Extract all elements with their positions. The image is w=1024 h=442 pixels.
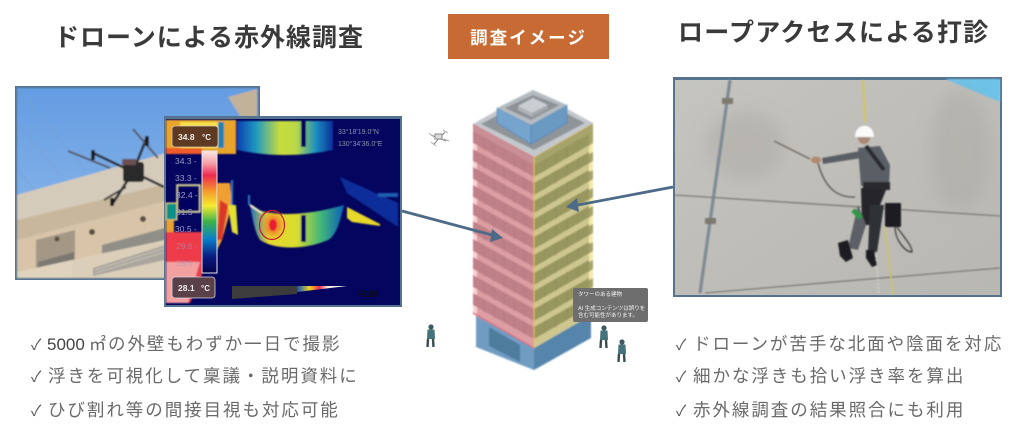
icon: person left: [427, 324, 435, 347]
title: rope access hammering test: ロープアクセスによる打診: [678, 19, 990, 47]
list: rope access benefits: [676, 334, 1003, 420]
thermal logo: FLIR: [358, 289, 378, 299]
thermal coordinates: 33°18'19.0"N: [338, 128, 379, 136]
roof corner: [228, 89, 257, 120]
list: rope access benefits: 細かな浮きも拾い浮き率を算出: [693, 366, 965, 386]
parapet: [17, 140, 258, 278]
thermal min label: °C: [201, 284, 210, 293]
thermal histogram: [232, 286, 347, 299]
list: drone benefits: ✓: [31, 337, 42, 354]
list: drone benefits: 5000: [47, 335, 85, 354]
thermal max label: °C: [202, 133, 211, 142]
illustration: isometric building: [473, 90, 593, 370]
list: rope access benefits: ✓: [676, 403, 687, 420]
thermal scale labels: 34.3 -: [175, 156, 197, 166]
thermal top band: [237, 121, 333, 155]
thermal top-left block: [166, 120, 236, 154]
worker: [811, 126, 912, 267]
list: drone benefits: ひび割れ等の間接目視も対応可能: [48, 400, 340, 420]
icon: person far right: [618, 339, 626, 362]
icon: person right: [600, 325, 608, 348]
tooltip: AI notice: 含む可能性があります。: [578, 311, 638, 319]
list: drone benefits: [31, 334, 359, 420]
list: rope access benefits: ✓: [676, 337, 687, 354]
icon: small drone: [429, 130, 449, 146]
ropes: [863, 80, 865, 122]
list: drone benefits: ✓: [31, 369, 42, 386]
arrow: thermal to pink wall: [402, 211, 503, 242]
thermal scale labels: 32.4 -: [176, 190, 198, 200]
thermal left lower: [166, 232, 202, 303]
photo: drone flying near building: [15, 86, 260, 280]
thermal scale labels: 28.6 -: [176, 258, 198, 268]
thermal scale labels: [175, 156, 198, 268]
list: rope access benefits: ✓: [676, 369, 687, 386]
thermal scale labels: 29.6 -: [176, 241, 198, 251]
thermal scale labels: 30.5 -: [175, 224, 197, 234]
thermal coordinates: [338, 128, 383, 148]
floors: [473, 131, 593, 348]
tooltip: AI notice: AI 生成コンテンツは誤りを: [578, 304, 645, 312]
list: drone benefits: 浮きを可視化して稟議・説明資料に: [48, 366, 359, 386]
list: drone benefits: ✓: [31, 403, 42, 420]
rod and cable: [774, 141, 810, 159]
list: drone benefits: の外壁もわずか一日で撮影: [108, 334, 341, 354]
thermal red circle: [260, 210, 284, 240]
thermal right object: [340, 177, 398, 227]
thermal max label: [172, 126, 218, 147]
roof: [473, 90, 593, 157]
thermal max label: 34.8: [178, 132, 195, 142]
title: survey image badge: 調査イメージ: [470, 28, 587, 48]
right face: [534, 123, 593, 348]
list: rope access benefits: 赤外線調査の結果照合にも利用: [693, 400, 965, 420]
thermal coordinates: 130°34'36.0"E: [338, 140, 383, 148]
left face: [473, 124, 534, 348]
photo: thermal image: [164, 116, 402, 307]
thermal scale labels: 31.5 -: [176, 207, 198, 217]
tooltip: AI notice: タワーのある建物: [578, 290, 623, 298]
title: drone infrared survey: ドローンによる赤外線調査: [54, 24, 364, 52]
thermal min label: 28.1: [178, 283, 195, 293]
list: drone benefits: ㎡: [89, 335, 106, 354]
photo: rope access worker: [673, 77, 1002, 297]
pipe: [700, 80, 730, 293]
tooltip: AI notice: [573, 288, 648, 322]
thermal min label: [172, 277, 215, 298]
drone: [68, 129, 164, 206]
thermal cup: [250, 205, 344, 248]
arrow: photo to yellow wall: [566, 187, 673, 212]
thermal mid objects: [217, 183, 232, 250]
base: [476, 315, 534, 370]
thermal colour bar: [202, 151, 217, 273]
thermal scale labels: 33.3 -: [175, 173, 197, 183]
penthouse: [497, 108, 531, 144]
title: survey image badge: [448, 14, 609, 59]
list: rope access benefits: ドローンが苦手な北面や陰面を対応: [693, 334, 1003, 354]
